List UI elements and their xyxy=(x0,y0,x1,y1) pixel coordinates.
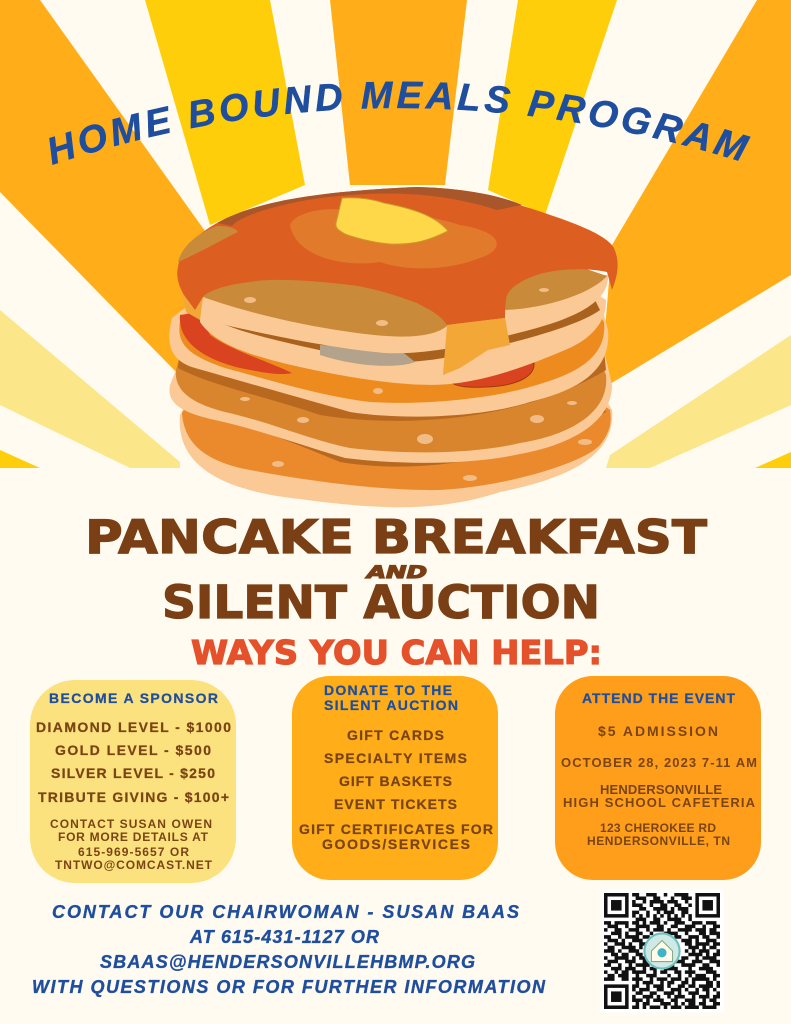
syrup top rim xyxy=(217,187,522,226)
red syrup puddle right xyxy=(450,363,534,387)
QR code xyxy=(600,889,724,1013)
panel: become a sponsor: SILVER LEVEL - $250 xyxy=(51,765,215,781)
bottom pancake xyxy=(180,390,612,507)
panel: become a sponsor xyxy=(30,680,236,883)
contact text block: SBAAS@HENDERSONVILLEHBMP.ORG xyxy=(100,952,475,972)
panel: attend the event: HENDERSONVILLE xyxy=(600,782,722,797)
fourth pancake xyxy=(169,350,612,463)
panel: become a sponsor: DIAMOND LEVEL - $1000 xyxy=(36,719,231,735)
panel: donate to the silent auction: GIFT CARDS xyxy=(347,727,444,743)
panel: donate to the silent auction: DONATE TO THE xyxy=(324,682,452,698)
panel: attend the event: OCTOBER 28, 2023 7-11 AM xyxy=(561,755,757,770)
panel: attend the event: ATTEND THE EVENT xyxy=(582,690,735,706)
panel: attend the event: $5 ADMISSION xyxy=(598,723,718,739)
top pancake edge xyxy=(199,275,608,353)
red syrup puddle left xyxy=(180,312,292,374)
panel: attend the event xyxy=(555,676,761,880)
pancake speckles xyxy=(240,288,592,481)
panel: donate to the silent auction: EVENT TICKETS xyxy=(334,796,457,812)
panel: become a sponsor: 615-969-5657 OR xyxy=(78,845,189,859)
panel: donate to the silent auction: GIFT BASKETS xyxy=(339,773,452,789)
subheading: Ways you can help: WAYS YOU CAN HELP: xyxy=(191,633,602,672)
panel: become a sponsor: TNTWO@COMCAST.NET xyxy=(55,858,213,872)
panel: become a sponsor: GOLD LEVEL - $500 xyxy=(55,742,211,758)
contact text block: WITH QUESTIONS OR FOR FURTHER INFORMATION xyxy=(32,977,546,997)
heading: Pancake Breakfast and Silent Auction: AND xyxy=(364,563,427,583)
contact text block xyxy=(32,902,546,997)
panel: attend the event: HENDERSONVILLE, TN xyxy=(587,834,730,848)
panel: become a sponsor: CONTACT SUSAN OWEN xyxy=(50,817,212,831)
syrup on top xyxy=(177,187,618,325)
panel: donate to the silent auction: GOODS/SERVICES xyxy=(322,836,470,852)
heading: Pancake Breakfast and Silent Auction: SILENT AUCTION xyxy=(162,576,600,629)
second pancake xyxy=(200,290,606,385)
contact text block: AT 615-431-1127 OR xyxy=(189,927,379,947)
QR centre logo xyxy=(644,933,680,969)
melted butter pool xyxy=(290,209,497,268)
third pancake xyxy=(169,300,608,417)
panel: donate to the silent auction: SILENT AUCTION xyxy=(324,697,458,713)
panel: become a sponsor: FOR MORE DETAILS AT xyxy=(58,830,209,844)
panel: become a sponsor: TRIBUTE GIVING - $100+ xyxy=(38,789,229,805)
heading: Pancake Breakfast and Silent Auction: PANCAKE BREAKFAST xyxy=(85,510,708,564)
heading: Pancake Breakfast and Silent Auction xyxy=(85,510,708,629)
butter pat xyxy=(336,198,448,244)
panel: attend the event: 123 CHEROKEE RD xyxy=(600,821,716,835)
top pancake face xyxy=(203,260,607,337)
tan overlay upper left xyxy=(178,226,238,262)
panel: attend the event: HIGH SCHOOL CAFETERIA xyxy=(563,795,756,810)
pancake stack illustration xyxy=(169,187,618,507)
panel: donate to the silent auction xyxy=(292,676,498,880)
amber drip left xyxy=(182,292,203,320)
syrup drip amber xyxy=(443,318,510,375)
panel: donate to the silent auction: GIFT CERTIFICATES FOR xyxy=(299,821,493,837)
sunburst rays xyxy=(0,0,791,468)
title: Home Bound Meals Program: HOME BOUND MEALS PROGRAM xyxy=(49,82,751,165)
contact text block: CONTACT OUR CHAIRWOMAN - SUSAN BAAS xyxy=(52,902,519,922)
panel: become a sponsor: BECOME A SPONSOR xyxy=(49,690,218,706)
panel: donate to the silent auction: SPECIALTY ITEMS xyxy=(324,750,467,766)
